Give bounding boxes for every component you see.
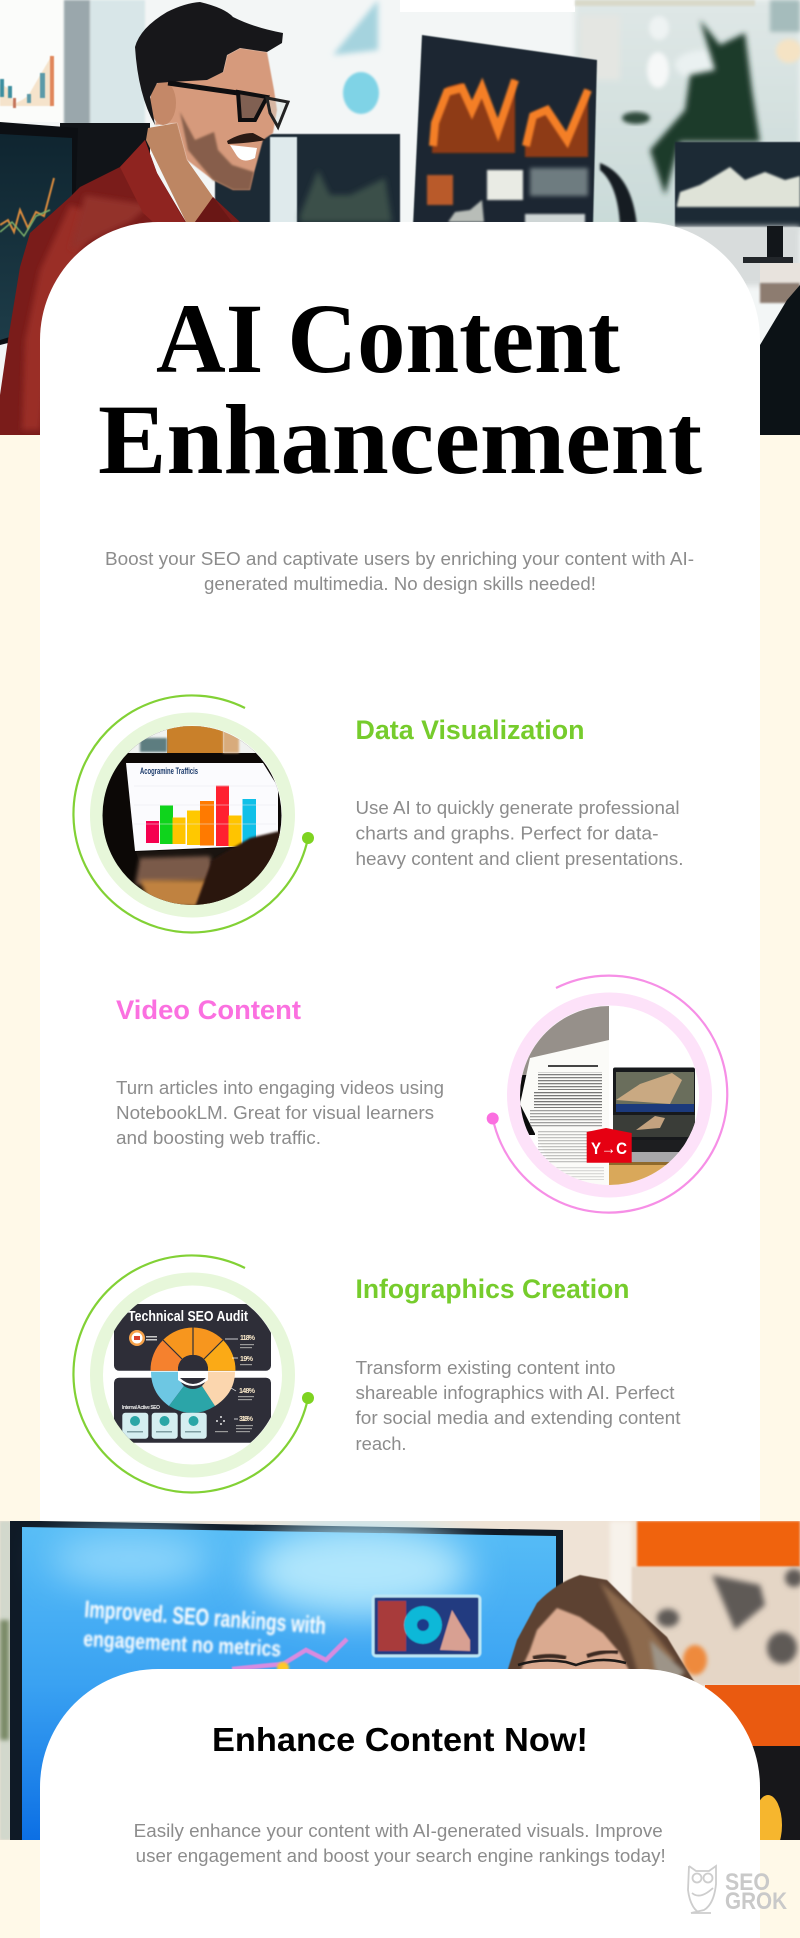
chair bbox=[600, 163, 637, 226]
face bbox=[155, 48, 277, 190]
body text: Transform existing content into bbox=[356, 1358, 616, 1378]
section: data visualization bbox=[73, 695, 684, 932]
hero photo: smiling analyst at monitors bbox=[0, 0, 800, 435]
blurred screen text: Improved. SEO rankings with bbox=[84, 1596, 327, 1640]
icon: laptop bar chart in ring: Acogramine Trafficis bbox=[140, 766, 198, 776]
intro text: Boost your SEO and captivate users by enriching your content with AI- bbox=[105, 549, 694, 569]
right wall bbox=[637, 1521, 800, 1567]
stats bbox=[239, 1335, 256, 1423]
body text bbox=[356, 798, 684, 869]
body text: charts and graphs. Perfect for data- bbox=[356, 824, 658, 844]
heading: Video Content bbox=[116, 995, 301, 1025]
title bbox=[98, 283, 702, 495]
title: Enhancement bbox=[98, 384, 702, 495]
icon: laptop bar chart in ring bbox=[73, 695, 314, 932]
footer photo: woman presenting SEO screen bbox=[0, 1521, 800, 1855]
call to action heading: Enhance Content Now! bbox=[212, 1721, 588, 1758]
intro text: generated multimedia. No design skills needed! bbox=[204, 574, 596, 594]
stats: 148% bbox=[239, 1388, 256, 1395]
chart line bbox=[232, 1639, 347, 1669]
call to action body: user engagement and boost your search engine rankings today! bbox=[136, 1846, 666, 1866]
donut bbox=[150, 1328, 236, 1413]
badge: Y→C bbox=[591, 1139, 627, 1158]
call to action body: Easily enhance your content with AI-generated visuals. Improve bbox=[134, 1821, 663, 1841]
wall chart bbox=[0, 0, 64, 122]
icon: technical SEO audit graphic in ring: Technical SEO Audit bbox=[128, 1308, 248, 1325]
body text: NotebookLM. Great for visual learners bbox=[116, 1103, 434, 1123]
body text: and boosting web traffic. bbox=[116, 1128, 321, 1148]
ear bbox=[150, 81, 176, 125]
section: infographics creation bbox=[73, 1255, 680, 1492]
body text: Turn articles into engaging videos using bbox=[116, 1078, 444, 1098]
body text: reach. bbox=[356, 1434, 406, 1454]
smile bbox=[227, 133, 266, 144]
body text: shareable infographics with AI. Perfect bbox=[356, 1383, 674, 1403]
heading: Infographics Creation bbox=[356, 1274, 630, 1304]
icon: technical SEO audit graphic in ring: Internal Active SEO bbox=[122, 1405, 160, 1411]
body text: for social media and extending content bbox=[356, 1408, 680, 1428]
left monitors bbox=[60, 123, 150, 192]
wordmark: GROK bbox=[725, 1888, 788, 1915]
glasses bbox=[168, 83, 238, 93]
stats: 118% bbox=[240, 1335, 256, 1342]
big monitor with orange charts bbox=[413, 35, 597, 226]
blurred screen text: engagement no metrics bbox=[83, 1626, 282, 1661]
screen bbox=[10, 1521, 563, 1840]
stats: 19% bbox=[240, 1356, 254, 1363]
woman bbox=[507, 1574, 696, 1682]
neck bbox=[146, 123, 213, 222]
bottom white card bbox=[40, 1669, 760, 1938]
body text: heavy content and client presentations. bbox=[356, 849, 684, 869]
collars bbox=[120, 140, 185, 222]
body text bbox=[116, 1078, 444, 1148]
thumbnail on screen bbox=[373, 1596, 480, 1656]
blurred screen text bbox=[83, 1596, 327, 1661]
man bbox=[0, 2, 288, 435]
body text: Use AI to quickly generate professional bbox=[356, 798, 680, 818]
wordmark: SEO bbox=[725, 1869, 770, 1896]
centre monitor bbox=[215, 134, 400, 226]
call to action body bbox=[134, 1821, 666, 1866]
shirt bbox=[0, 140, 240, 435]
title: AI Content bbox=[156, 283, 620, 394]
icon: owl bbox=[688, 1866, 716, 1913]
heading: Data Visualization bbox=[356, 715, 584, 745]
body text bbox=[356, 1358, 680, 1454]
logo: SEO Grok owl bbox=[688, 1866, 788, 1915]
hair bbox=[135, 2, 283, 125]
icon: technical SEO audit graphic in ring bbox=[73, 1255, 314, 1492]
main white card bbox=[40, 222, 760, 1530]
stats: 318% bbox=[239, 1416, 254, 1423]
badge bbox=[587, 1128, 632, 1163]
right monitor bbox=[675, 142, 800, 227]
plant bbox=[650, 20, 760, 195]
intro text bbox=[105, 549, 694, 594]
section: video content bbox=[116, 976, 727, 1213]
wordmark bbox=[725, 1869, 788, 1915]
icon: article to video in ring bbox=[487, 976, 727, 1213]
